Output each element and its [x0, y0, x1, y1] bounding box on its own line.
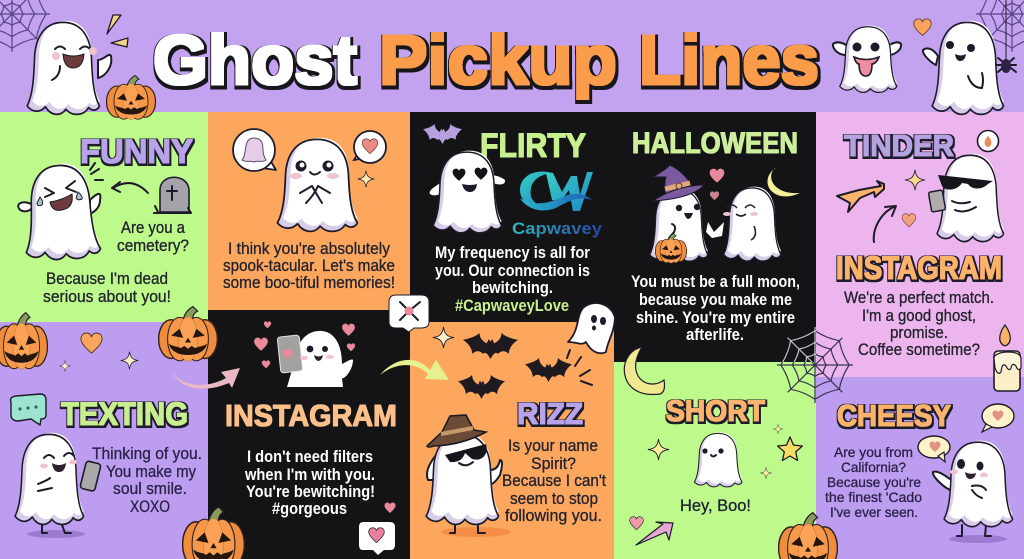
title: Ghost	[153, 21, 357, 99]
icon: rizz sparkle	[433, 327, 454, 348]
icon: pumpkin top	[106, 75, 156, 120]
text: sweet message: some boo-tiful memories!	[223, 274, 395, 292]
text: cheesy message: I've ever seen.	[830, 504, 918, 520]
panel: tinder and instagram	[816, 112, 1024, 377]
text: flirty message: #CapwaveyLove	[455, 297, 569, 315]
ghost: small hey boo	[694, 432, 742, 487]
text: texting message: You make my	[106, 463, 197, 481]
text: instagram message	[244, 448, 375, 518]
heading: halloween: HALLOWEEN	[632, 127, 798, 160]
icon: pink heart	[630, 517, 643, 530]
text: cheesy message: California?	[841, 459, 906, 475]
text: rizz message: Because I can't	[502, 472, 606, 490]
icon: burst marks	[107, 15, 128, 47]
text: instagram match	[844, 289, 994, 359]
header band	[0, 0, 1024, 112]
text: rizz message: Is your name	[508, 437, 598, 455]
text: instagram message: You're bewitching!	[246, 483, 375, 501]
ghost: crying laughing	[18, 162, 101, 261]
icon: linked ghost hands	[706, 222, 724, 238]
heading: funny: FUNNY	[80, 133, 193, 171]
text: instagram match: Coffee sometime?	[858, 341, 980, 359]
text: rizz message: following you.	[505, 507, 602, 525]
icon: like bubble	[359, 522, 395, 555]
icon: cheese bubble left	[918, 436, 950, 462]
ghost: heart eyes	[430, 151, 505, 233]
icon: network bubble	[389, 295, 429, 332]
icon: small heart	[384, 502, 396, 513]
heading: instagram: INSTAGRAM	[225, 398, 397, 433]
text: funny question	[117, 219, 189, 255]
icon: heart speech bubble	[354, 131, 386, 163]
text: funny question: Are you a	[121, 219, 186, 237]
text: halloween message: afterlife.	[686, 326, 744, 344]
heading: short: SHORT	[666, 395, 765, 428]
logo: capwavey	[512, 172, 603, 238]
icon: motion lines	[567, 350, 592, 385]
text: instagram message: I don't need filters	[247, 448, 373, 466]
heading: cheesy: CHEESY	[837, 398, 951, 433]
icon: tinder bubble	[978, 130, 998, 152]
panel: flirty	[410, 112, 614, 322]
icon: sparkles	[59, 352, 138, 372]
icon: short sparkles	[648, 424, 802, 479]
text: instagram match: I'm a good ghost,	[862, 307, 976, 325]
text: sweet message	[223, 240, 395, 292]
ghost: witch	[650, 165, 708, 261]
icon: lavender bat	[423, 124, 462, 144]
icon: pumpkin bottom left	[183, 507, 244, 559]
icon: sparkle	[905, 170, 925, 190]
text: flirty message: My frequency is all for	[435, 244, 591, 262]
icon: heart	[902, 214, 916, 227]
logo: capwavey: Capwavey	[512, 219, 603, 238]
ghost: texting with phone	[15, 433, 101, 538]
ghost: sunglasses with phone	[928, 154, 1004, 242]
title: Pickup	[379, 21, 617, 99]
icon: bat group	[458, 333, 572, 399]
icon: yellow arrow	[380, 360, 449, 380]
text: flirty message: bewitching.	[472, 279, 553, 297]
text: texting message: Thinking of you.	[92, 445, 202, 463]
icon: heart top right	[914, 19, 931, 35]
text: instagram match: We're a perfect match.	[844, 289, 994, 307]
icon: pink arrow	[636, 522, 673, 545]
icon: cheese bubble right	[982, 404, 1014, 432]
icon: chat bubble	[11, 394, 46, 425]
ghost: happy partner	[723, 187, 781, 261]
heading: rizz: RIZZ	[517, 396, 583, 431]
text: cheesy message: Because you're	[827, 474, 921, 490]
panel: funny	[0, 112, 208, 322]
icon: sparkle	[358, 171, 374, 187]
text: texting message: XOXO	[130, 498, 170, 516]
text: rizz message: seem to stop	[510, 490, 598, 508]
text: instagram message: when I'm with you.	[244, 466, 375, 484]
heading: instagram orange: INSTAGRAM	[836, 250, 1002, 286]
text: instagram message: #gorgeous	[272, 500, 347, 518]
title: Lines	[639, 21, 819, 99]
ghost: laughing top left	[27, 21, 111, 114]
ghost: selfie with phone	[277, 331, 353, 387]
ghost: detective with hat	[426, 415, 511, 537]
icon: pumpkin centre	[159, 307, 217, 361]
text: flirty message	[435, 244, 591, 315]
heading: flirty: FLIRTY	[480, 127, 586, 165]
icon: pink arrow	[172, 368, 240, 389]
icon: pumpkin basket	[655, 233, 687, 263]
text: rizz message	[502, 437, 606, 525]
text: halloween message: You must be a full moon,	[631, 273, 800, 291]
panel: instagram	[208, 310, 410, 559]
ghost: waving top right	[923, 21, 1004, 114]
icon: crescent moon	[767, 167, 800, 196]
icon: corner cobweb left	[0, 0, 50, 52]
text: funny question: cemetery?	[117, 237, 189, 255]
panel: sweet message	[208, 112, 410, 310]
text: instagram match: promise.	[890, 324, 948, 342]
heading: tinder: TINDER	[844, 128, 954, 163]
text: funny answer: Because I'm dead	[46, 270, 168, 288]
text: halloween message: because you make me	[639, 291, 792, 309]
icon: laugh lines and arrow	[90, 163, 148, 193]
ghost: flying small	[568, 303, 615, 353]
panel: rizz	[410, 322, 614, 559]
icon: spider	[996, 0, 1016, 73]
ghost: tongue out	[833, 26, 901, 92]
icon: ghost speech bubble	[233, 129, 276, 171]
panel: short	[614, 362, 816, 559]
heading: texting: TEXTING	[61, 396, 188, 432]
icon: pumpkin left	[0, 313, 47, 369]
icon: instagram hearts	[254, 321, 355, 368]
text: cheesy message	[825, 444, 922, 520]
icon: pumpkin bottom right	[779, 513, 837, 559]
text: hey boo: Hey, Boo!	[680, 497, 751, 515]
icon: texting heart	[81, 333, 102, 353]
panel: texting	[0, 322, 208, 559]
text: sweet message: I think you're absolutely	[228, 240, 391, 258]
ghost: cheesy waving	[933, 441, 1013, 543]
icon: curved arrow	[874, 206, 896, 242]
panel: halloween	[614, 112, 816, 362]
icon: corner cobweb right	[976, 0, 1024, 52]
icon: candle	[994, 325, 1021, 391]
text: cheesy message: Are you from	[834, 444, 913, 460]
icon: big cobweb	[777, 327, 853, 403]
text: halloween message: shine. You're my entire	[636, 309, 795, 327]
ghost: shy	[277, 138, 357, 231]
icon: orange arrow	[837, 181, 884, 212]
text: funny answer	[43, 270, 171, 306]
icon: hearts	[710, 169, 724, 200]
text: texting message	[92, 445, 202, 516]
text: cheesy message: the finest 'Cado	[825, 489, 922, 505]
title	[153, 21, 819, 99]
icon: yellow crescent moon	[624, 347, 664, 395]
text: flirty message: you. Our connection is	[435, 262, 590, 280]
text: texting message: soul smile.	[113, 480, 187, 498]
text: sweet message: spook-tacular. Let's make	[223, 257, 395, 275]
icon: gravestone	[154, 177, 191, 213]
text: rizz message: Spirit?	[531, 455, 576, 473]
text: funny answer: serious about you!	[43, 288, 171, 306]
text: halloween message	[631, 273, 800, 344]
panel: cheesy	[816, 377, 1024, 559]
